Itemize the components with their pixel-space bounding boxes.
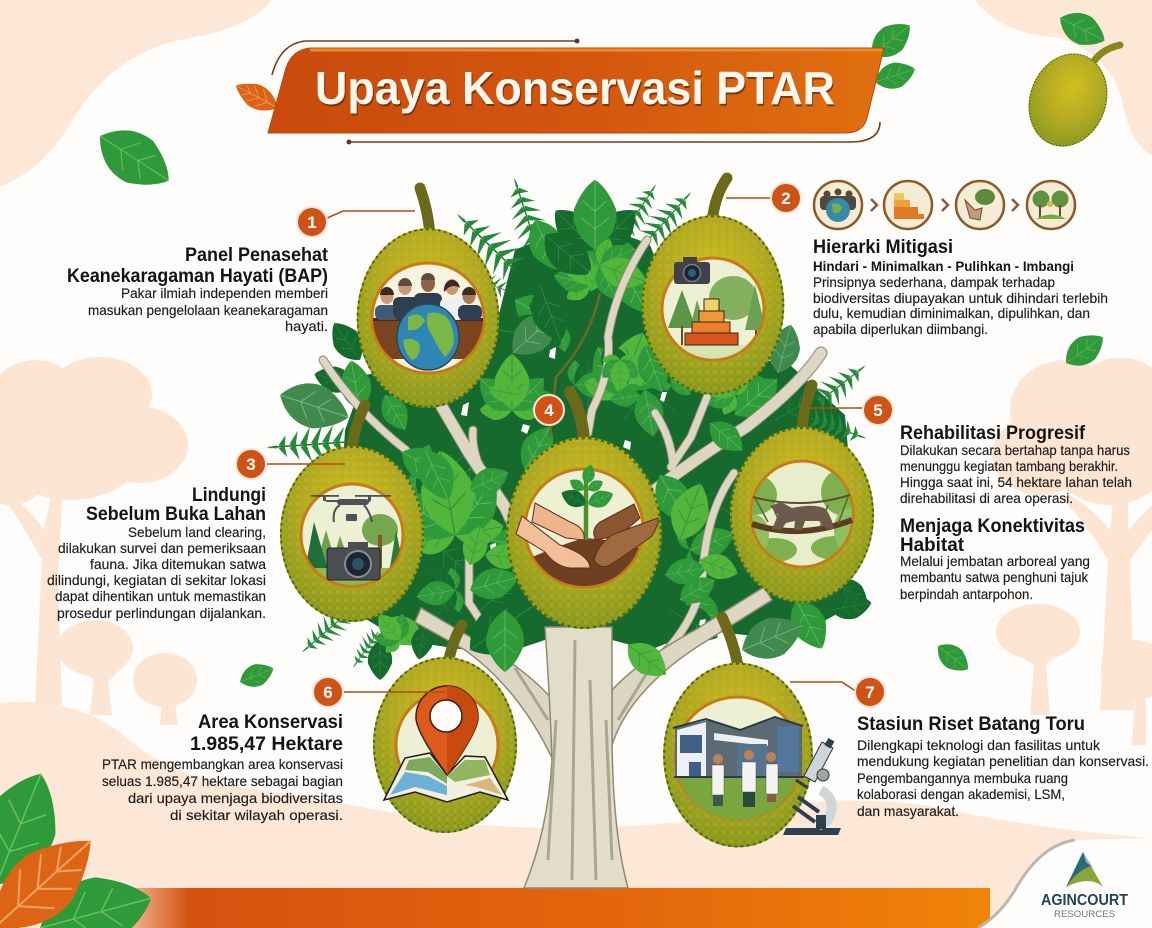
arrow bbox=[871, 199, 877, 211]
text block 1: Pakar ilmiah independen memberi bbox=[121, 286, 328, 301]
badge 5 bbox=[863, 395, 893, 425]
title banner bbox=[230, 14, 919, 144]
text block 2: Prinsipnya sederhana, dampak terhadap bbox=[813, 275, 1055, 290]
text block 6: Area Konservasi bbox=[198, 712, 343, 733]
text block 3: dilindungi, kegiatan di sekitar lokasi bbox=[47, 573, 266, 588]
text block 2: dulu, kemudian diminimalkan, dipulihkan, dan bbox=[813, 306, 1090, 321]
decorative leaf right bbox=[1058, 326, 1111, 374]
icon: sprout bbox=[558, 463, 616, 540]
bottom left leaves bbox=[0, 760, 160, 928]
foliage front layer bbox=[378, 355, 750, 686]
decorative leaf lower left bbox=[236, 658, 277, 692]
badge 6 bbox=[313, 677, 343, 707]
jackfruit illustration top right bbox=[1016, 4, 1120, 158]
badge 1 bbox=[297, 207, 327, 237]
text block 5: Dilakukan secara bertahap tanpa harus bbox=[900, 443, 1130, 458]
text block 5: Habitat bbox=[900, 535, 965, 556]
text block 5 bbox=[900, 423, 1132, 602]
text block 5: Menjaga Konektivitas bbox=[900, 516, 1085, 537]
fruit 6: conservation area bbox=[373, 625, 517, 833]
badge 3 bbox=[236, 449, 266, 479]
fruit 2: mitigation hierarchy bbox=[642, 178, 784, 395]
badge 2: 2 bbox=[781, 189, 791, 208]
decorative leaf top left bbox=[86, 115, 182, 202]
text block 7: kolaborasi dengan akademisi, LSM, bbox=[857, 787, 1065, 802]
fruit 3: protect before land clearing bbox=[280, 405, 424, 622]
icon: location pin bbox=[416, 686, 478, 775]
foliage back layer bbox=[265, 172, 875, 680]
text block 7: dan masyarakat. bbox=[857, 804, 959, 819]
text block 7: mendukung kegiatan penelitian dan konservasi. bbox=[857, 754, 1149, 769]
text block 3: fauna. Jika ditemukan satwa bbox=[90, 557, 266, 572]
text block 2: biodiversitas diupayakan untuk dihindari terlebih bbox=[813, 291, 1108, 306]
connector lines and number badges bbox=[236, 183, 893, 707]
text block 1: masukan pengelolaan keanekaragaman bbox=[88, 303, 328, 318]
text block 7 bbox=[857, 714, 1149, 819]
fruit 5: habitat connectivity bbox=[730, 385, 874, 603]
fruit 4: planting bbox=[506, 392, 662, 629]
foliage backdrop bbox=[335, 231, 858, 655]
arrow bbox=[1012, 199, 1018, 211]
badge 7: 7 bbox=[865, 683, 875, 702]
badge 5: 5 bbox=[873, 401, 883, 420]
icon: minimise bbox=[884, 181, 932, 229]
text block 1: hayati. bbox=[285, 319, 328, 334]
text block 5: Hingga saat ini, 54 hektare lahan telah bbox=[900, 475, 1132, 490]
text block 3: dilakukan survei dan pemeriksaan bbox=[58, 541, 266, 556]
icon: camera bbox=[674, 257, 710, 284]
tree bbox=[265, 172, 875, 888]
mitigation hierarchy icon row bbox=[814, 181, 1075, 229]
icon: scientists bbox=[712, 750, 778, 807]
bottom orange bar bbox=[100, 888, 990, 928]
icon: hierarchy pyramid bbox=[685, 299, 738, 345]
gaps in the canopy bbox=[461, 347, 706, 627]
text block 6: dari upaya menjaga biodiversitas bbox=[128, 791, 343, 806]
text block 5: menunggu kegiatan tambang berakhir. bbox=[900, 459, 1118, 474]
badge 2 bbox=[771, 183, 801, 213]
text block 5: Melalui jembatan arboreal yang bbox=[900, 554, 1090, 569]
icon: research building bbox=[673, 717, 804, 778]
arrow bbox=[942, 199, 948, 211]
fruit 1: biodiversity advisory panel bbox=[357, 188, 499, 408]
logo: Agincourt Resources: AGINCOURT bbox=[1041, 892, 1128, 909]
background: tree silhouettes bbox=[0, 357, 1152, 745]
text block 1: Panel Penasehat bbox=[185, 245, 329, 266]
text block 6 bbox=[102, 712, 343, 823]
badge 3: 3 bbox=[246, 455, 256, 474]
text block 5: direhabilitasi di area operasi. bbox=[900, 491, 1073, 506]
title banner: Upaya Konservasi PTAR bbox=[316, 64, 836, 116]
icon: hands bbox=[516, 503, 658, 568]
badge 7 bbox=[855, 677, 885, 707]
title: Upaya Konservasi PTAR bbox=[315, 62, 835, 114]
text block 3: dapat dihentikan untuk memastikan bbox=[55, 589, 266, 604]
text block 7: Pengembangannya membuka ruang bbox=[857, 771, 1068, 786]
text block 2: Hindari - Minimalkan - Pulihkan - Imbangi bbox=[813, 258, 1074, 274]
text block 3: prosedur perlindungan dijalankan. bbox=[57, 606, 266, 621]
icon: camera bbox=[327, 542, 380, 580]
icon: microscope bbox=[783, 738, 841, 835]
trunk and branches bbox=[323, 240, 821, 888]
text block 1 bbox=[67, 245, 329, 334]
badge 6: 6 bbox=[323, 683, 333, 702]
icon: map bbox=[384, 753, 508, 802]
text block 6: seluas 1.985,47 hektare sebagai bagian bbox=[102, 774, 343, 789]
fruit 7: Batang Toru research station bbox=[663, 617, 841, 847]
icon: offset bbox=[1027, 181, 1075, 229]
icon: globe bbox=[397, 304, 459, 370]
icon: restore bbox=[956, 181, 1004, 229]
icon: avoid bbox=[814, 181, 862, 229]
text block 7: Dilengkapi teknologi dan fasilitas untuk bbox=[857, 738, 1100, 753]
logo corner bbox=[978, 838, 1152, 928]
text block 3: Sebelum land clearing, bbox=[128, 525, 266, 540]
text block 6: di sekitar wilayah operasi. bbox=[170, 808, 343, 823]
logo: Agincourt Resources: RESOURCES bbox=[1054, 909, 1115, 920]
text block 5: membantu satwa penghuni tajuk bbox=[900, 570, 1088, 585]
text block 7: Stasiun Riset Batang Toru bbox=[857, 714, 1085, 735]
text block 1: Keanekaragaman Hayati (BAP) bbox=[67, 266, 328, 287]
icon: arboreal bridge with animal bbox=[752, 495, 852, 531]
text block 3: Lindungi bbox=[192, 485, 266, 506]
text block 5: berpindah antarpohon. bbox=[900, 587, 1033, 602]
text block 2 bbox=[813, 237, 1108, 337]
decorative leaf lower right bbox=[931, 637, 975, 679]
text block 2: Hierarki Mitigasi bbox=[813, 237, 953, 258]
logo: Agincourt Resources bbox=[1041, 852, 1128, 920]
text block 3: Sebelum Buka Lahan bbox=[86, 504, 266, 525]
text block 6: 1.985,47 Hektare bbox=[190, 734, 343, 755]
text block 2: apabila diperlukan diimbangi. bbox=[813, 322, 988, 337]
text block 3 bbox=[47, 485, 266, 621]
badge 4 bbox=[534, 395, 564, 425]
banner leaves bbox=[230, 14, 919, 119]
text block 5: Rehabilitasi Progresif bbox=[900, 423, 1086, 444]
badge 4: 4 bbox=[544, 401, 554, 420]
text block 6: PTAR mengembangkan area konservasi bbox=[102, 757, 343, 772]
badge 1: 1 bbox=[307, 213, 317, 232]
icon: drone bbox=[311, 495, 391, 522]
